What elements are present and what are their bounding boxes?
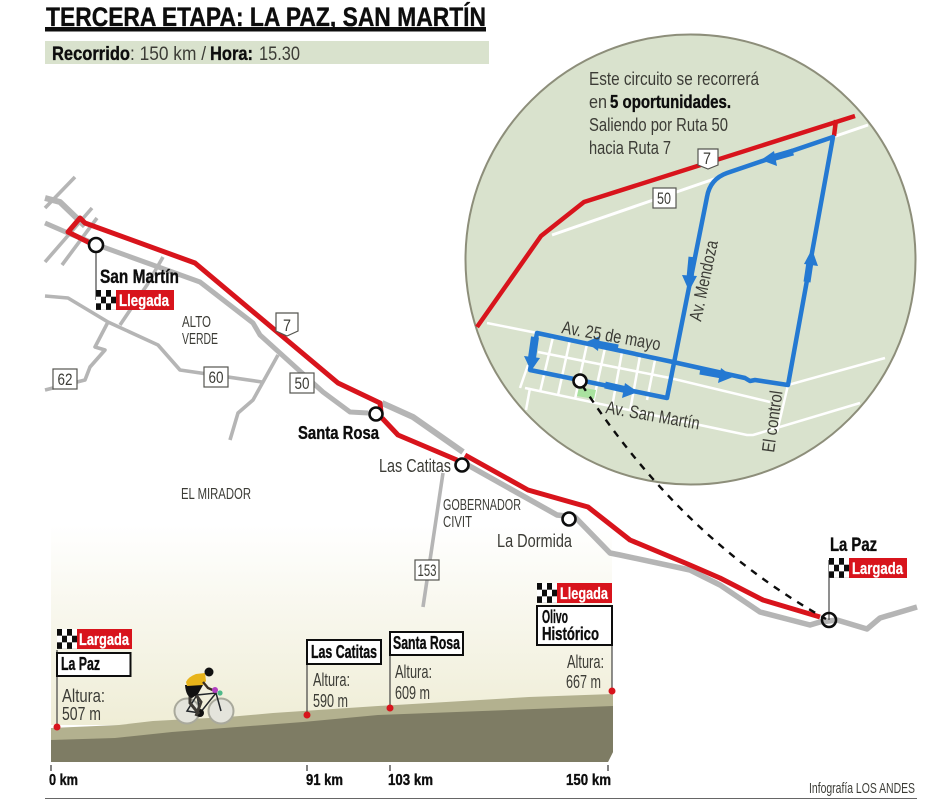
elevation background xyxy=(51,525,612,725)
panel: circuit inset xyxy=(466,34,916,484)
point: Santa Rosa xyxy=(386,632,463,712)
route summary band: 15.30 xyxy=(259,44,300,65)
distance axis: 150 km xyxy=(566,772,611,789)
road shield: 153: 153 xyxy=(418,561,436,580)
distance axis: 0 km xyxy=(49,772,78,789)
marker: inset start xyxy=(574,374,586,388)
inset note: hacia Ruta 7 xyxy=(589,138,671,158)
road shield: 60: 60 xyxy=(208,368,224,387)
street labels: Av. Mendoza xyxy=(685,238,722,323)
dashed connector xyxy=(582,385,826,619)
inset shield: 7: 7 xyxy=(703,149,711,168)
inset note: en xyxy=(589,92,607,112)
point: Las Catitas: Altura: xyxy=(313,670,350,690)
inset shield: 50: 50 xyxy=(657,189,671,208)
inset streets xyxy=(487,125,885,435)
cyclist xyxy=(174,668,234,724)
inset note: Saliendo por Ruta 50 xyxy=(589,115,728,135)
marker: Las Catitas xyxy=(456,458,468,472)
route summary band: Recorrido xyxy=(52,44,130,65)
place names: CIVIT xyxy=(443,514,472,531)
point: Santa Rosa: Altura: xyxy=(395,662,432,682)
marker: La Paz start xyxy=(822,535,907,627)
point: Santa Rosa: 609 m xyxy=(395,683,430,703)
road shield: 50: 50 xyxy=(294,374,310,393)
point: Las Catitas xyxy=(304,640,381,718)
marker: La Paz start: La Paz xyxy=(830,535,877,556)
point: Olivo Histórico: Histórico xyxy=(542,624,599,644)
road shield: 7 xyxy=(276,313,298,336)
marker: San Martín finish: Llegada xyxy=(119,291,169,310)
road shield: 153 xyxy=(415,560,439,580)
route summary band xyxy=(45,41,489,65)
distance axis: 103 km xyxy=(388,772,433,789)
marker: San Martín finish xyxy=(89,238,179,310)
point: Santa Rosa: Santa Rosa xyxy=(393,633,461,653)
place names: Las Catitas xyxy=(379,456,451,476)
inset note: 5 oportunidades. xyxy=(610,92,731,112)
route summary band: Hora: xyxy=(210,44,253,65)
point: Olivo Histórico: 667 m xyxy=(566,672,601,692)
street labels: Av. San Martín xyxy=(604,397,701,433)
title: TERCERA ETAPA: LA PAZ, SAN MARTÍN xyxy=(46,1,486,32)
secondary roads xyxy=(45,177,443,607)
point: La Paz: Altura: xyxy=(62,686,105,706)
route summary band: : 150 km / xyxy=(130,44,207,65)
place names xyxy=(181,314,573,551)
place names: ALTO xyxy=(182,314,211,331)
point: Olivo Histórico: Altura: xyxy=(567,652,604,672)
place names: GOBERNADOR xyxy=(443,497,521,514)
point: La Paz xyxy=(54,629,132,730)
place names: La Dormida xyxy=(497,531,573,551)
point: La Paz: 507 m xyxy=(62,704,101,724)
street labels xyxy=(560,238,787,454)
place names: Santa Rosa xyxy=(298,423,380,443)
point: Las Catitas: 590 m xyxy=(313,691,348,711)
inset note xyxy=(589,69,760,158)
marker: Santa Rosa xyxy=(370,408,382,420)
main road xyxy=(45,198,917,629)
marker: San Martín finish: San Martín xyxy=(100,267,179,288)
point: Las Catitas: Las Catitas xyxy=(311,642,377,662)
point: La Paz: Largada xyxy=(79,630,129,649)
street labels: Av. 25 de mayo xyxy=(560,317,662,354)
red race route xyxy=(68,218,820,617)
terrain xyxy=(51,694,613,762)
marker: La Dormida xyxy=(562,512,576,526)
marker: La Paz start: Largada xyxy=(852,559,903,578)
plaza marker xyxy=(577,387,596,399)
road shield: 62: 62 xyxy=(58,370,72,389)
red highway in inset xyxy=(477,116,855,327)
distance axis xyxy=(49,765,611,789)
road shield: 7: 7 xyxy=(283,316,291,335)
panel: route map xyxy=(45,177,917,629)
point: Olivo Histórico: Olivo xyxy=(542,607,568,627)
point: La Paz: La Paz xyxy=(61,654,100,674)
inset note: Este circuito se recorrerá xyxy=(589,69,760,89)
direction arrows xyxy=(524,151,818,398)
street labels: El control xyxy=(758,389,787,454)
inset shield: 7 xyxy=(698,149,718,169)
place names: EL MIRADOR xyxy=(181,486,251,503)
place names: VERDE xyxy=(182,331,218,348)
point: Olivo Histórico: Llegada xyxy=(560,584,608,603)
blue circuit xyxy=(530,137,833,398)
distance axis: 91 km xyxy=(306,772,343,789)
chart: elevation profile xyxy=(49,583,616,789)
point: Olivo Histórico xyxy=(537,583,616,694)
